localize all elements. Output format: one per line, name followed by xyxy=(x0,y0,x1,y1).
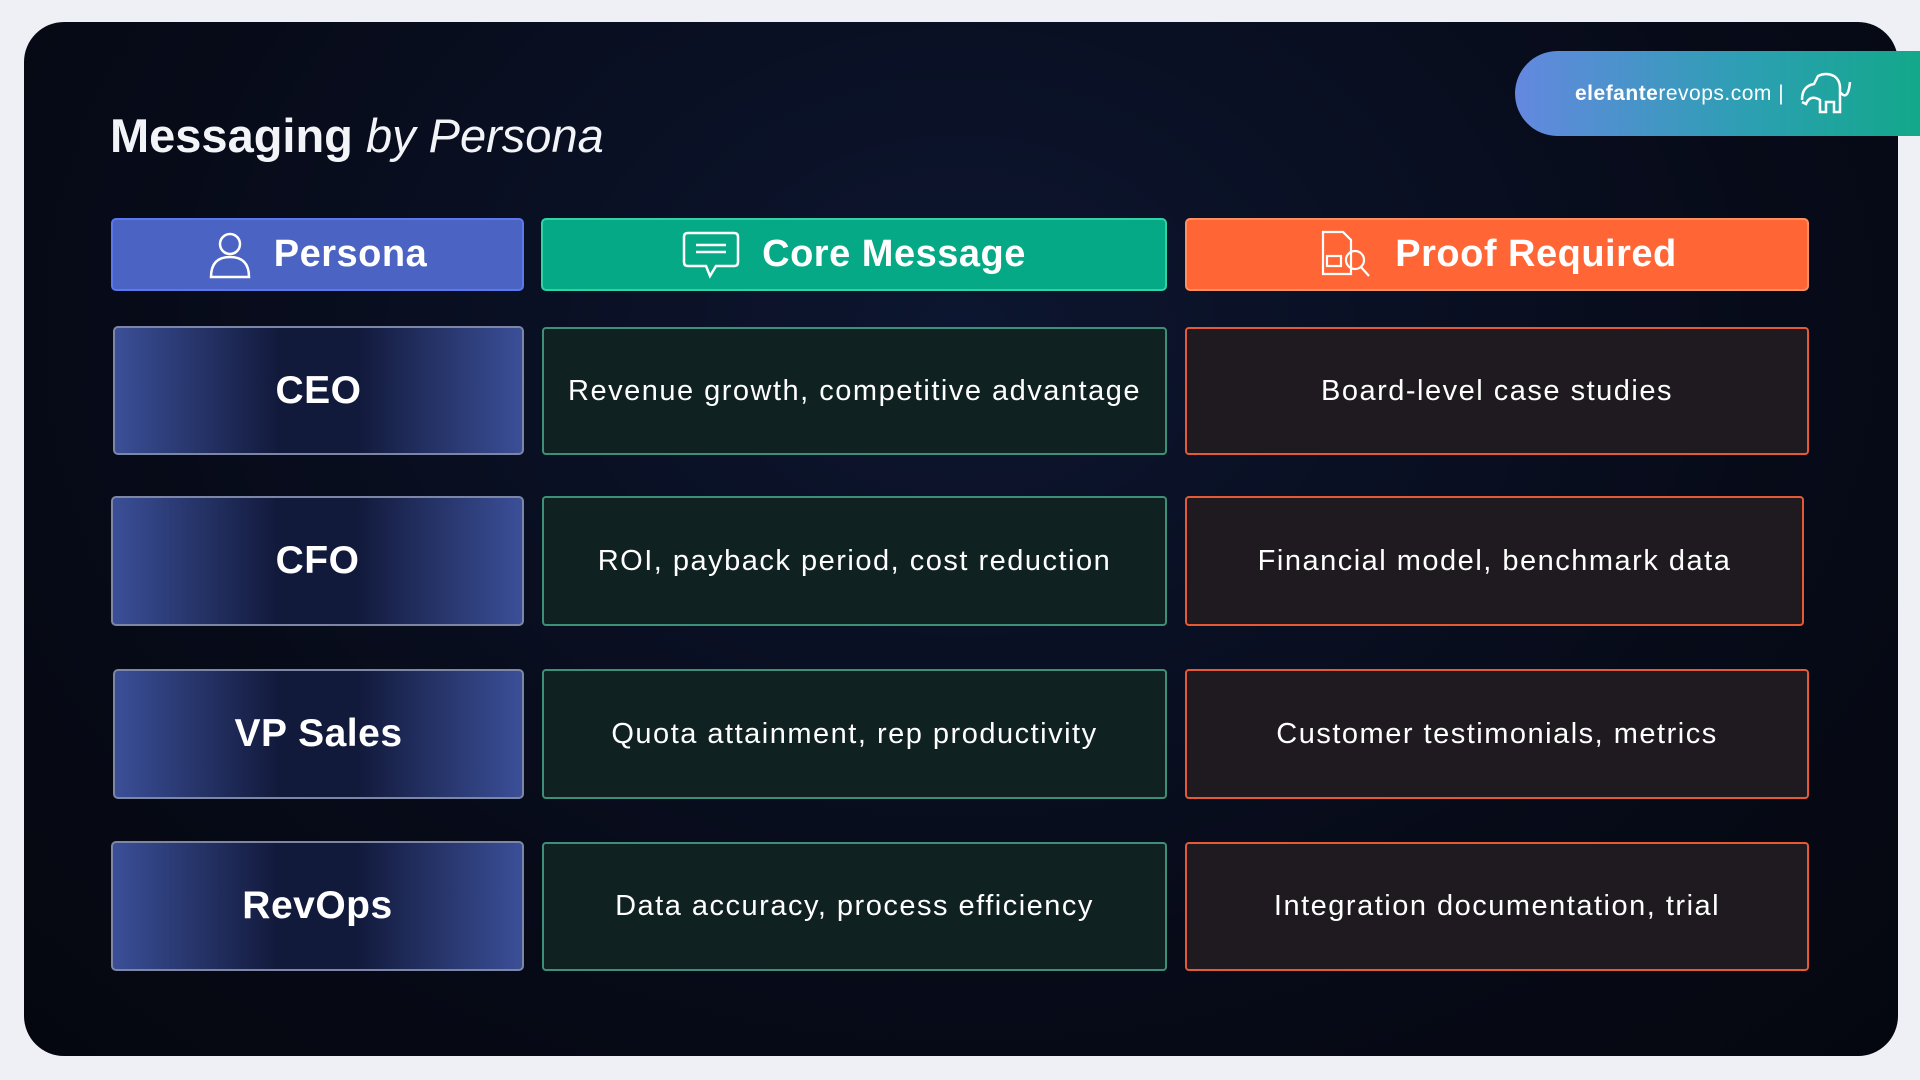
row 3: VP Sales xyxy=(113,669,524,799)
header: Proof Required xyxy=(1185,218,1809,291)
row 4 proof xyxy=(1185,842,1809,971)
row 1 proof xyxy=(1185,327,1809,455)
header: Core Message: Core Message xyxy=(762,233,1026,275)
title xyxy=(110,108,604,162)
row 3 core message: Quota attainment, rep productivity xyxy=(611,718,1098,750)
row 2: CFO xyxy=(111,496,524,626)
icon: document search xyxy=(1322,230,1370,277)
row 3 proof xyxy=(1185,669,1809,799)
row 4 core message xyxy=(542,842,1167,971)
row 4: RevOps: RevOps xyxy=(242,884,393,927)
row 1: CEO: CEO xyxy=(275,368,362,412)
row 4 core message: Data accuracy, process efficiency xyxy=(615,890,1094,922)
logo pill: elefanterevops.com | xyxy=(1575,82,1784,104)
row 3 core message xyxy=(542,669,1167,799)
header: Persona: Persona xyxy=(274,233,427,275)
row 1 proof: Board-level case studies xyxy=(1321,374,1673,406)
row 2 core message xyxy=(542,496,1167,626)
row 2 proof: Financial model, benchmark data xyxy=(1258,544,1731,576)
row 2: CFO: CFO xyxy=(276,539,359,582)
header: Proof Required: Proof Required xyxy=(1395,233,1677,275)
row 4 proof: Integration documentation, trial xyxy=(1274,890,1720,922)
row 4: RevOps xyxy=(111,841,524,971)
title: Messaging xyxy=(110,108,353,162)
row 2 proof xyxy=(1185,496,1804,626)
row 3 proof: Customer testimonials, metrics xyxy=(1276,718,1718,750)
row 2 core message: ROI, payback period, cost reduction xyxy=(598,544,1111,576)
icon: elephant xyxy=(1800,72,1852,114)
row 1 core message: Revenue growth, competitive advantage xyxy=(568,374,1141,406)
header: Persona xyxy=(111,218,524,291)
icon: person xyxy=(210,232,250,278)
row 3: VP Sales: VP Sales xyxy=(234,712,403,755)
title: by Persona xyxy=(366,108,604,162)
row 1 core message xyxy=(542,327,1167,455)
row 1: CEO xyxy=(113,326,524,455)
icon: chat xyxy=(682,232,740,279)
logo pill xyxy=(1515,51,1920,136)
header: Core Message xyxy=(541,218,1167,291)
